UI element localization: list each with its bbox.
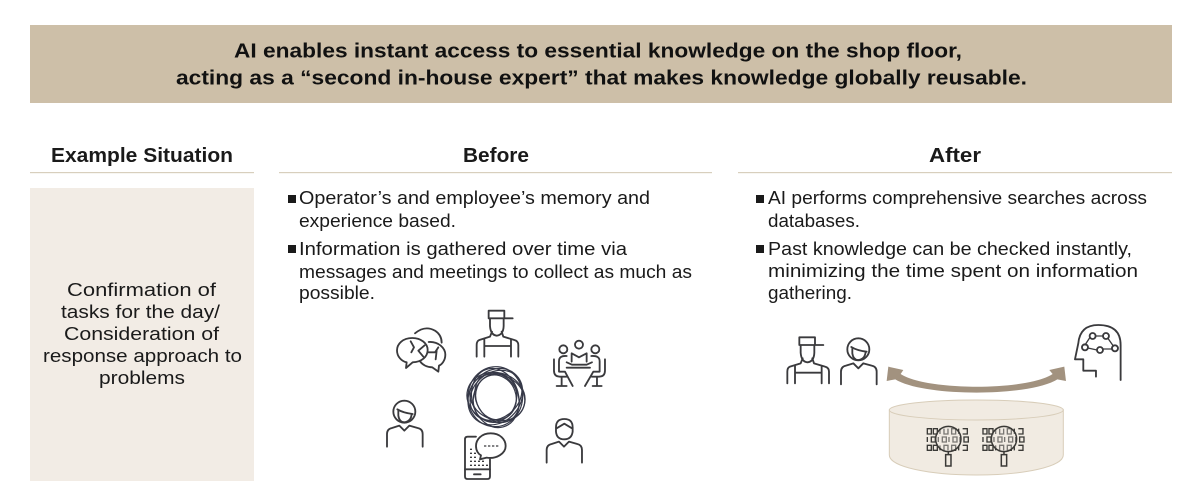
- title banner: acting as a “second in-house expert” that makes knowledge globally reusable.: [176, 66, 1027, 90]
- icon: woman: [387, 401, 423, 447]
- before bullet list: [288, 188, 692, 303]
- before bullet list: messages and meetings to collect as much as: [299, 262, 692, 282]
- heading: after: After: [929, 145, 981, 167]
- icon: worker: [787, 337, 829, 383]
- situation description: [43, 280, 242, 388]
- situation description: Consideration of: [64, 324, 220, 344]
- after bullet list: gathering.: [768, 283, 852, 303]
- heading: example situation: Example Situation: [51, 145, 233, 167]
- icon: AI head: [1075, 325, 1121, 380]
- situation description: response approach to: [43, 346, 242, 366]
- icon: woman: [841, 338, 877, 384]
- situation description: problems: [99, 368, 185, 388]
- icon: chat bubbles: [397, 328, 445, 372]
- before icon cluster: [387, 311, 605, 479]
- situation description: tasks for the day/: [61, 302, 220, 322]
- after bullet list: databases.: [768, 211, 860, 231]
- after bullet list: Past knowledge can be checked instantly,: [768, 239, 1132, 259]
- situation description: Confirmation of: [67, 280, 217, 300]
- icon: phone with message: [465, 433, 506, 479]
- icon: meeting: [554, 341, 605, 386]
- database cylinder: [889, 400, 1063, 475]
- icon: binary search left: [927, 426, 968, 466]
- icon: man: [547, 419, 582, 463]
- before bullet list: experience based.: [299, 211, 456, 231]
- icon: worker: [477, 311, 518, 357]
- icon: binary search right: [983, 426, 1024, 466]
- after diagram: [787, 325, 1121, 475]
- after bullet list: minimizing the time spent on information: [768, 261, 1138, 281]
- panel: example situation: [30, 145, 254, 481]
- arrow: two-way exchange: [887, 367, 1066, 393]
- after bullet list: [756, 188, 1147, 303]
- after bullet list: AI performs comprehensive searches across: [768, 188, 1147, 208]
- icon: tangled scribble: [457, 357, 534, 436]
- before bullet list: Operator’s and employee’s memory and: [299, 188, 650, 208]
- before bullet list: possible.: [299, 283, 375, 303]
- title banner: [30, 25, 1172, 103]
- heading: before: Before: [463, 145, 529, 167]
- panel: before: [279, 145, 712, 479]
- panel: after: [738, 145, 1172, 475]
- before bullet list: Information is gathered over time via: [299, 239, 628, 259]
- title banner: AI enables instant access to essential knowledge on the shop floor,: [234, 40, 962, 62]
